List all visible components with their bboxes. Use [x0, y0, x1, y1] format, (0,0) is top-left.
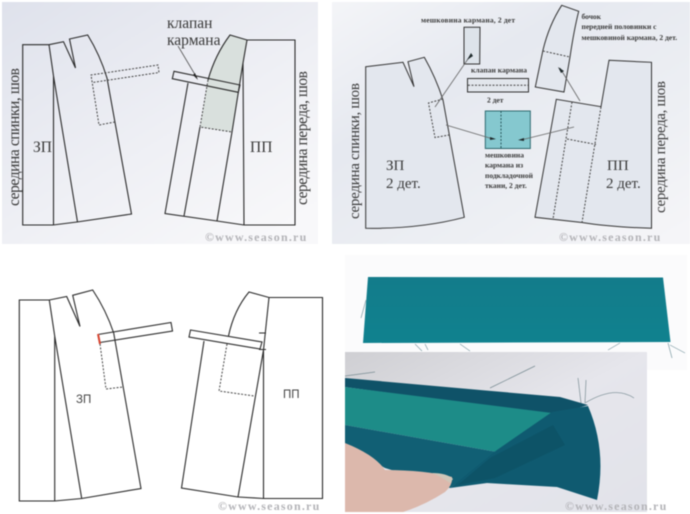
loose threads: [345, 366, 634, 403]
watermark: ©www.season.ru: [559, 230, 661, 244]
finger: [345, 443, 452, 512]
label: ZP 2 det: [386, 158, 421, 192]
panel: cut pieces (top right): [332, 2, 690, 244]
watermark: ©www.season.ru: [205, 230, 307, 244]
label: ZP: ЗП: [33, 139, 52, 156]
label: PP: ПП: [250, 139, 272, 156]
back piece: [19, 290, 141, 501]
watermark: ©www.season.ru: [218, 499, 320, 513]
arrows: [435, 56, 580, 140]
dark top edge: [345, 378, 588, 415]
lining label: [485, 150, 534, 190]
flap on front piece: [189, 330, 262, 349]
notches: [259, 333, 266, 350]
label: PP 2 det: [606, 158, 641, 192]
flap on back piece: [98, 322, 172, 342]
loose threads: [361, 300, 685, 358]
panel: pattern with pocket flap (top left): кармана: [167, 32, 221, 49]
fold crease: [458, 425, 565, 485]
flap count: 2 дет: [487, 96, 504, 104]
lining label: кармана из: [485, 160, 523, 170]
lining label: мешковина: [485, 150, 524, 160]
back piece with notch: [366, 57, 464, 228]
label: back centre seam: середина спинки, шов: [347, 83, 363, 219]
lining label: подкладочной: [485, 171, 534, 180]
pocket bag piece: [464, 27, 480, 64]
pocket flap: [172, 71, 240, 92]
panel: fabric strip photo (bottom right, top): [345, 255, 687, 370]
flap piece label: клапан кармана: [471, 66, 527, 74]
label: ZP: ЗП: [76, 394, 91, 406]
label: back centre seam: середина спинки, шов: [6, 68, 23, 206]
dashed pocket back: [100, 344, 123, 389]
side panel label: бочок: [582, 12, 602, 21]
flap label: клапан: [167, 15, 212, 32]
pocket bag label: мешковина кармана, 2 дет: [421, 16, 515, 24]
lining label: ткани, 2 дет.: [485, 181, 527, 190]
fabric strip: [363, 277, 670, 343]
label: ZP 2 det: 2 дет.: [386, 176, 421, 192]
front skirt piece: [165, 35, 295, 225]
flap arrow: [178, 46, 198, 80]
label: PP 2 det: ПП: [607, 158, 629, 174]
label: front centre seam: середина переда, шов: [653, 81, 669, 213]
label: ZP 2 det: ЗП: [386, 158, 405, 174]
side panel label: [582, 12, 677, 42]
lower dark band: [345, 425, 497, 488]
side panel label: мешковиной кармана, 2 дет.: [582, 33, 677, 42]
side panel label: передней половинки с: [582, 22, 657, 31]
flap piece: [468, 78, 528, 92]
watermark: ©www.season.ru: [565, 499, 667, 513]
lighter inner lining: [345, 387, 552, 452]
dashed pocket front: [219, 344, 254, 396]
dashed pocket on back piece: [91, 65, 159, 125]
red mark: [98, 334, 100, 344]
back skirt piece: [23, 35, 132, 225]
front piece: [182, 292, 322, 498]
fingernail: [432, 473, 453, 483]
side panel piece: [535, 5, 579, 92]
label: PP: ПП: [283, 389, 300, 401]
front piece: [535, 60, 652, 228]
label: PP 2 det: 2 дет.: [606, 176, 641, 192]
panel: pattern with pocket flap (top left): [2, 2, 318, 244]
teal lining piece: [485, 111, 530, 148]
folded corner: [450, 406, 600, 500]
panel: folded flap photo (bottom right, bottom): [345, 352, 647, 512]
arrow heads: [467, 53, 564, 141]
label: front centre seam: середина переда, шов: [294, 71, 311, 205]
panel: flap pattern (bottom left): [19, 290, 323, 513]
